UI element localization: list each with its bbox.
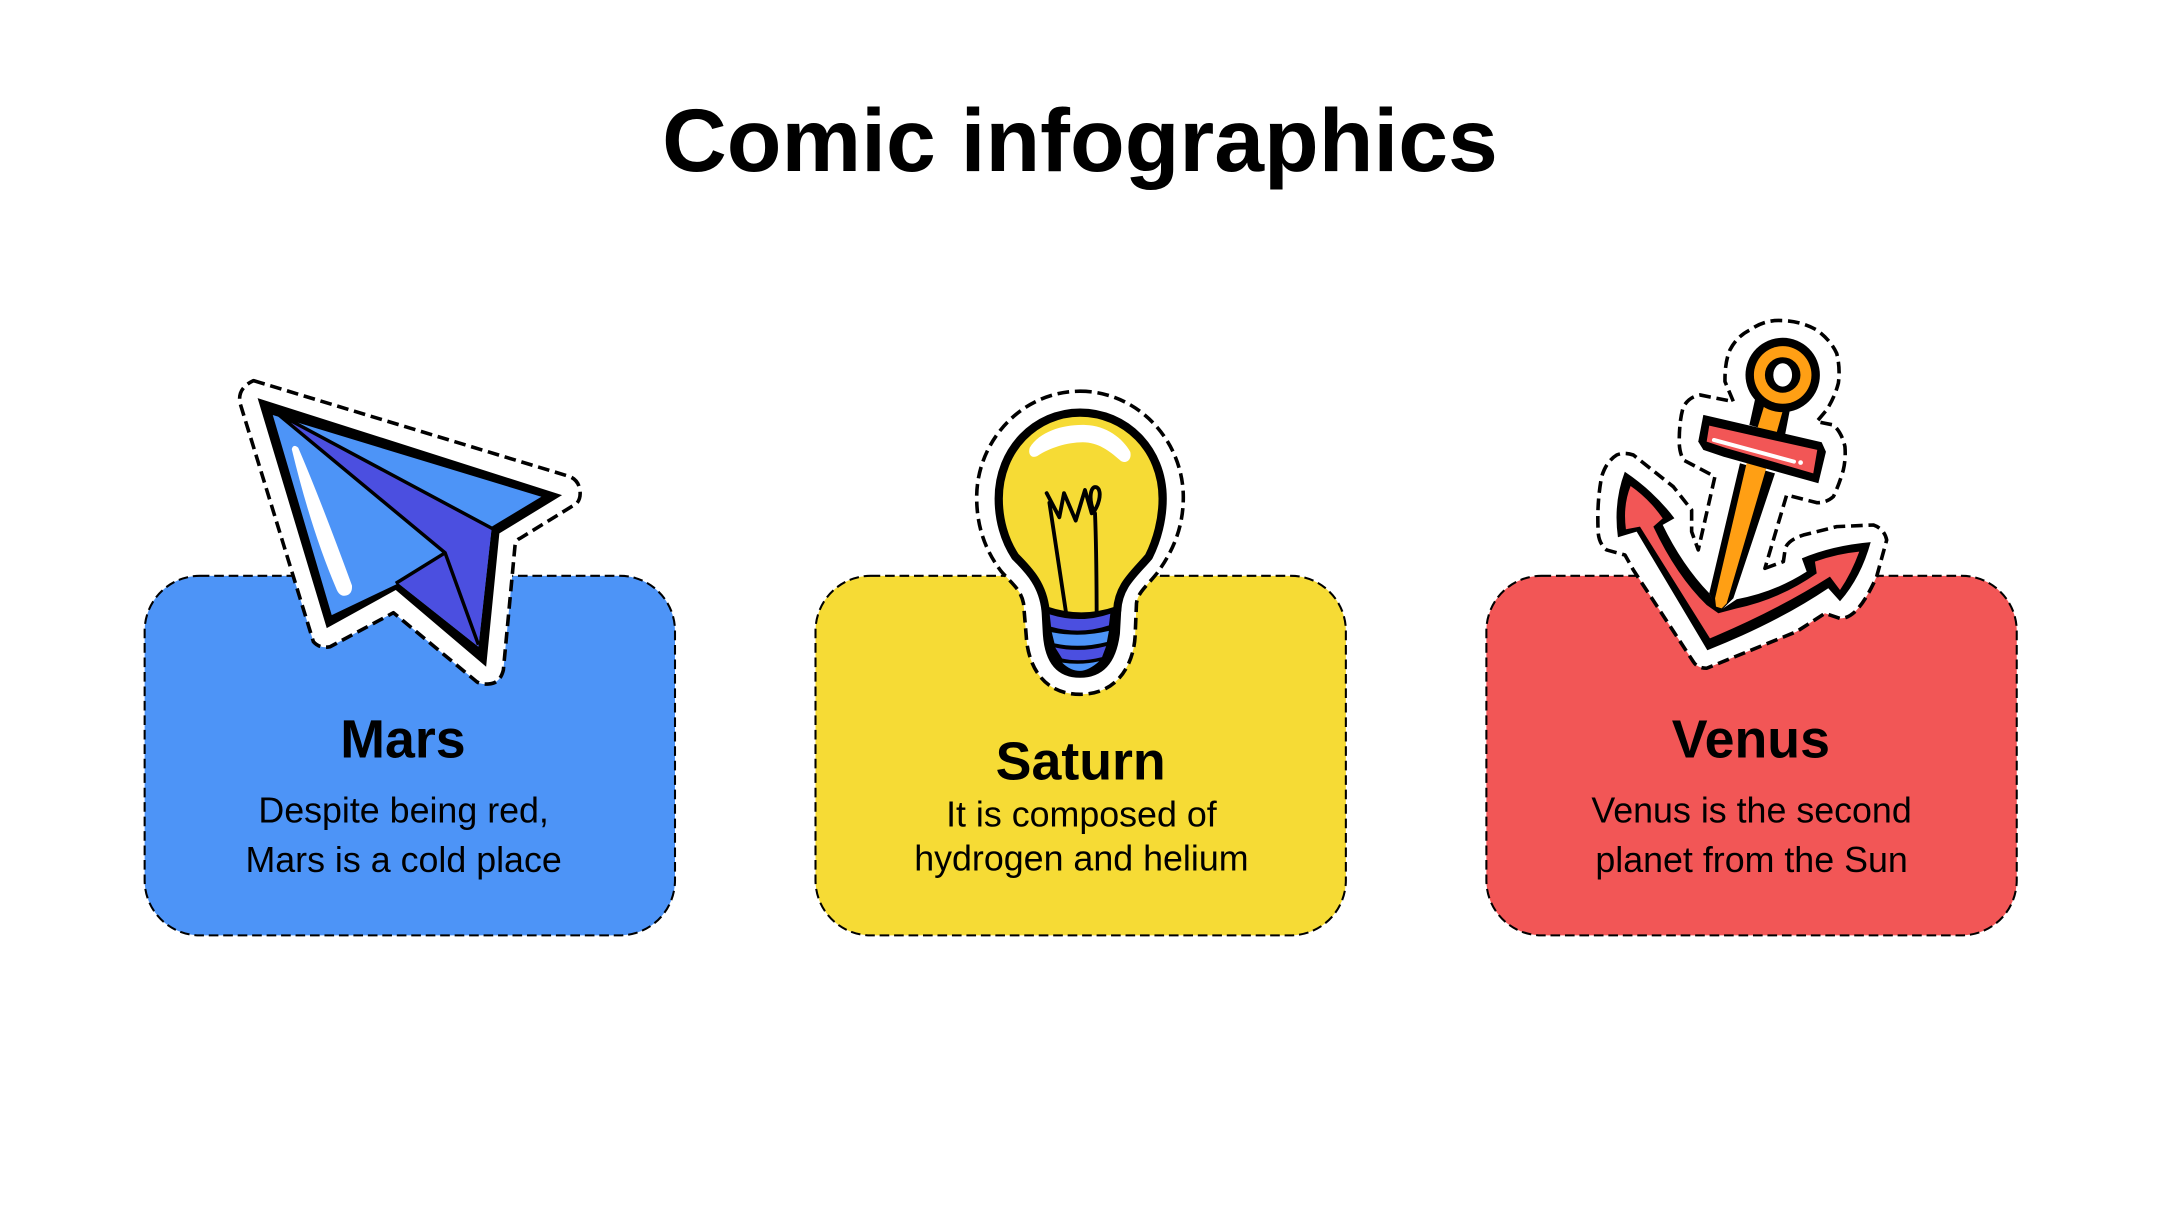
card background: Mars (145, 576, 675, 935)
description: Saturn: It is composed of (946, 795, 1217, 835)
heading: Saturn: Saturn (996, 732, 1166, 792)
description: Venus: planet from the Sun (1595, 840, 1908, 880)
description: Saturn: hydrogen and helium (914, 839, 1249, 879)
icon: light bulb (977, 391, 1183, 694)
panel: Venus (1486, 320, 2017, 935)
panel: Mars (145, 381, 675, 935)
panel: Saturn (816, 391, 1346, 935)
title: Comic infographics (662, 90, 1498, 190)
card background: Saturn (816, 576, 1346, 935)
heading: Venus: Venus (1672, 710, 1830, 770)
description: Mars: Despite being red, (258, 790, 549, 830)
description: Venus: Venus is the second (1591, 790, 1912, 830)
icon: paper plane (240, 381, 580, 684)
icon: anchor (1598, 320, 1887, 668)
heading: Mars: Mars (340, 710, 466, 770)
description: Mars: Mars is a cold place (245, 840, 562, 880)
card background: Venus (1486, 576, 2017, 935)
